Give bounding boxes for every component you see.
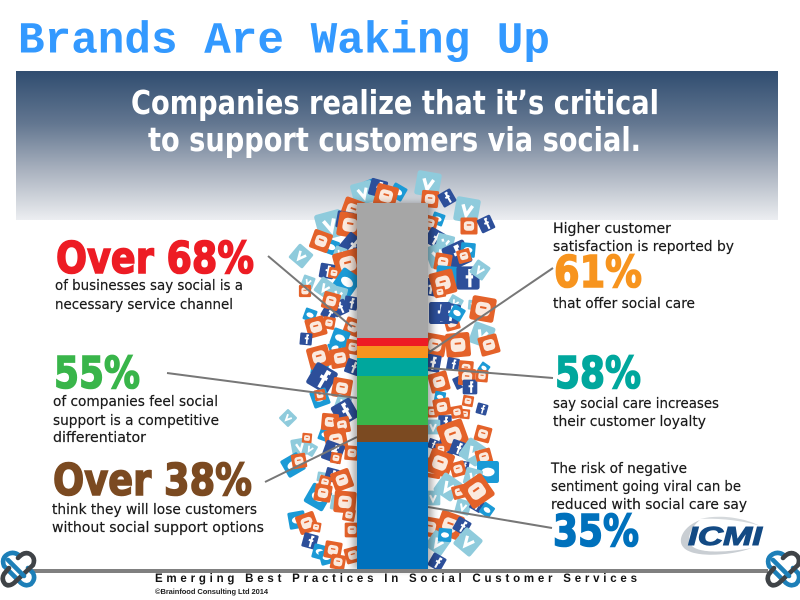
- callout: over 68%: necessary service channel: [55, 297, 233, 313]
- callout: 61%: that offer social care: [553, 296, 695, 312]
- callout: 61%: satisfaction is reported by: [553, 239, 734, 255]
- callout: 35%: The risk of negative: [550, 461, 687, 477]
- callout: over 38%: [52, 455, 264, 536]
- callout: 55%: support is a competitive: [53, 413, 219, 429]
- header text: Companies realize that it’s critical: [131, 83, 659, 122]
- icon: left knot logo: [3, 553, 34, 585]
- stacked bar chart: [353, 203, 432, 569]
- social icons: left cluster: [279, 177, 408, 570]
- logo: ICMI: ICMI: [688, 521, 763, 551]
- callout: over 38%: Over 38%: [53, 455, 252, 506]
- callout: 58%: say social care increases: [553, 396, 719, 412]
- callout: 61%: 61%: [554, 247, 642, 298]
- callout: 55%: differentiator: [53, 430, 146, 446]
- title: Brands Are Waking Up: [18, 16, 550, 66]
- callout: 35%: 35%: [553, 506, 639, 557]
- header banner: [16, 71, 778, 220]
- header text: to support customers via social.: [148, 120, 641, 159]
- header text: [131, 83, 659, 159]
- callout: 35%: sentiment going viral can be: [551, 479, 741, 495]
- footer rule: [30, 569, 768, 573]
- callout: over 38%: think they will lose customers: [52, 502, 257, 518]
- callout: 55%: [53, 348, 219, 446]
- leader lines: [167, 256, 553, 528]
- copyright: ©Brainfood Consulting Ltd 2014: [155, 587, 269, 596]
- logo: ICMI: [681, 517, 763, 555]
- callout: 35%: [550, 461, 747, 557]
- callout: 55%: of companies feel social: [53, 394, 218, 410]
- callout: over 68%: Over 68%: [56, 233, 254, 284]
- callout: 58%: their customer loyalty: [553, 414, 706, 430]
- callout: 58%: 58%: [555, 348, 641, 399]
- callout: 61%: Higher customer: [553, 221, 671, 237]
- footer text: Emerging Best Practices In Social Customer Services: [155, 573, 637, 585]
- social icons: right cluster: [414, 170, 501, 572]
- callout: 58%: [553, 348, 719, 430]
- callout: 55%: 55%: [54, 348, 140, 399]
- icon: right knot logo: [768, 553, 799, 585]
- callout: 61%: [553, 221, 734, 312]
- callout: 35%: reduced with social care say: [551, 497, 747, 513]
- callout: over 68%: [55, 233, 254, 313]
- callout: over 68%: of businesses say social is a: [55, 278, 243, 294]
- callout: over 38%: without social support options: [52, 520, 264, 536]
